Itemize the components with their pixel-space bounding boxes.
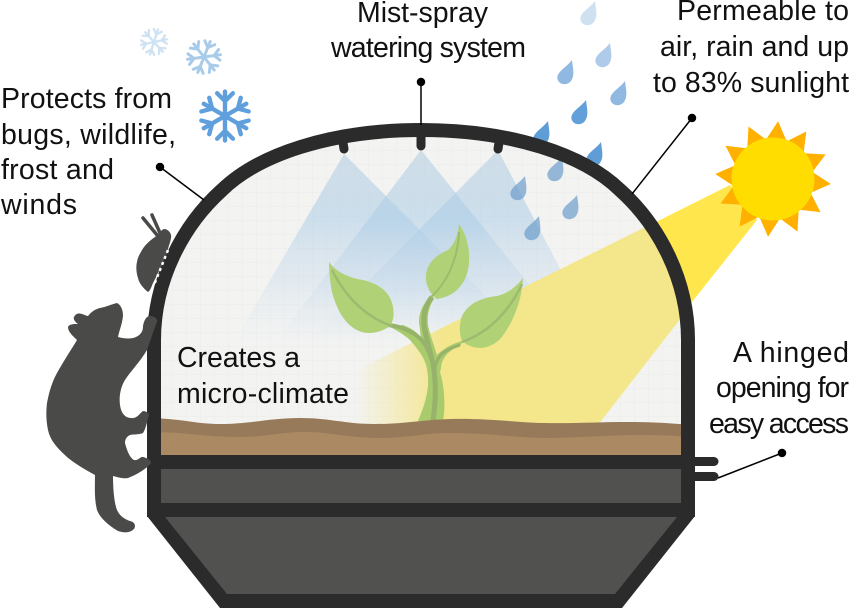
plant	[329, 224, 523, 421]
label: a hinged opening for easy access: opening for	[716, 372, 850, 404]
label: protects from bugs, wildlife, frost and winds: bugs, wildlife,	[1, 119, 176, 151]
label: creates a micro-climate	[177, 342, 349, 410]
dome frame and planter walls	[154, 130, 688, 517]
panel: dome interior	[161, 137, 681, 455]
left leaf	[329, 262, 394, 333]
leader: permeable cover	[632, 114, 696, 194]
hinge pins	[695, 462, 714, 476]
icon: sun	[715, 121, 831, 237]
label: protects from bugs, wildlife, frost and winds	[0, 83, 176, 221]
panel: planter frame base	[147, 516, 695, 608]
icon: large snowflake	[200, 92, 250, 140]
mist spray cones	[255, 150, 560, 330]
label: a hinged opening for easy access	[709, 337, 850, 440]
icon: climbing animal silhouette	[46, 303, 157, 532]
label: creates a micro-climate: micro-climate	[177, 378, 349, 410]
label: creates a micro-climate: Creates a	[177, 342, 300, 374]
leader: hinged opening	[718, 450, 786, 478]
label: mist-spray watering system	[330, 0, 526, 64]
soil	[161, 418, 681, 455]
label: protects from bugs, wildlife, frost and winds: frost and	[1, 154, 114, 186]
right leaf	[460, 278, 523, 348]
label: a hinged opening for easy access: easy access	[709, 408, 849, 440]
label: protects from bugs, wildlife, frost and winds: Protects from	[1, 83, 172, 115]
plant stem shading	[388, 297, 460, 421]
icon: beetle silhouette	[136, 215, 171, 292]
leader: mist spray	[418, 78, 424, 125]
plant stem	[390, 296, 463, 421]
label: permeable to air, rain and sunlight	[653, 0, 849, 99]
middle leaf	[426, 224, 469, 299]
leader: protects from bugs	[156, 164, 204, 200]
icon: falling rain outside the dome	[533, 1, 626, 166]
sun beam outside the dome	[600, 185, 757, 418]
raindrops inside the dome	[510, 157, 578, 240]
icon: medium snowflake	[182, 35, 226, 79]
label: a hinged opening for easy access: A hinged	[733, 337, 849, 369]
spray nozzles	[342, 136, 500, 149]
label: mist-spray watering system: watering system	[330, 32, 526, 64]
label: permeable to air, rain and sunlight: air, rain and up	[660, 31, 849, 63]
panel: dark grey planter box	[161, 469, 681, 594]
icon: small snowflake	[137, 25, 171, 59]
label: permeable to air, rain and sunlight: to 83% sunlight	[653, 67, 849, 99]
label: protects from bugs, wildlife, frost and winds: winds	[0, 189, 77, 221]
sunlight inside the dome	[362, 228, 680, 424]
